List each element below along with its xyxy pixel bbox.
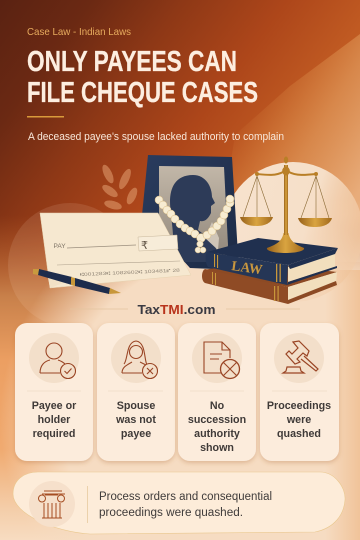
divider: right of logo (226, 308, 300, 310)
divider: left of logo (70, 308, 128, 310)
label: holder (38, 414, 70, 426)
label: shown (200, 442, 234, 454)
panel: spouse was not payee (97, 323, 175, 461)
label: payee (121, 428, 151, 440)
label: were (286, 414, 311, 426)
label: required (33, 428, 75, 440)
icon: person with check (29, 333, 79, 383)
pen (33, 269, 121, 294)
conclusion text: proceedings were quashed. (99, 507, 243, 519)
stacked law books: LAW (230, 259, 263, 278)
cheque: ₹ (141, 239, 148, 252)
label: Spouse (117, 400, 155, 412)
subtitle: A deceased payee's spouse lacked authority to complain (28, 131, 284, 143)
title: ONLY PAYEES CAN (27, 46, 237, 78)
stacked law books (202, 238, 338, 304)
title (27, 46, 258, 109)
icon: gavel (274, 333, 324, 383)
cheque: ⑆001283⑆ 1082602⑆ 103481⑈ 28 (80, 268, 181, 277)
label: Payee or (32, 400, 76, 412)
label: authority (194, 428, 240, 440)
cheque: PAY (54, 243, 66, 250)
label: succession (188, 414, 246, 426)
icon: ionic column (29, 481, 75, 527)
logo: TaxTMI.com: TaxTMI.com (138, 303, 216, 317)
panel: no succession authority shown (178, 323, 256, 461)
memorial portrait frame (142, 155, 238, 270)
label: No (210, 400, 225, 412)
icon: laurel sprig (100, 163, 139, 211)
title underline (27, 116, 64, 118)
panel: conclusion (13, 472, 345, 534)
title: FILE CHEQUE CASES (27, 77, 258, 109)
cheque (40, 213, 191, 288)
panel: proceedings were quashed (260, 323, 339, 461)
kicker label: Case Law - Indian Laws (27, 26, 131, 38)
label: Proceedings (267, 400, 331, 412)
panel: payee or holder required (15, 323, 93, 461)
icon: document with cross (192, 333, 242, 383)
scales of justice (240, 156, 332, 253)
label: was not (115, 414, 156, 426)
jasmine garland (155, 195, 234, 253)
icon: woman with cross (111, 333, 161, 383)
label: quashed (277, 428, 321, 440)
conclusion text: Process orders and consequential (99, 491, 272, 503)
